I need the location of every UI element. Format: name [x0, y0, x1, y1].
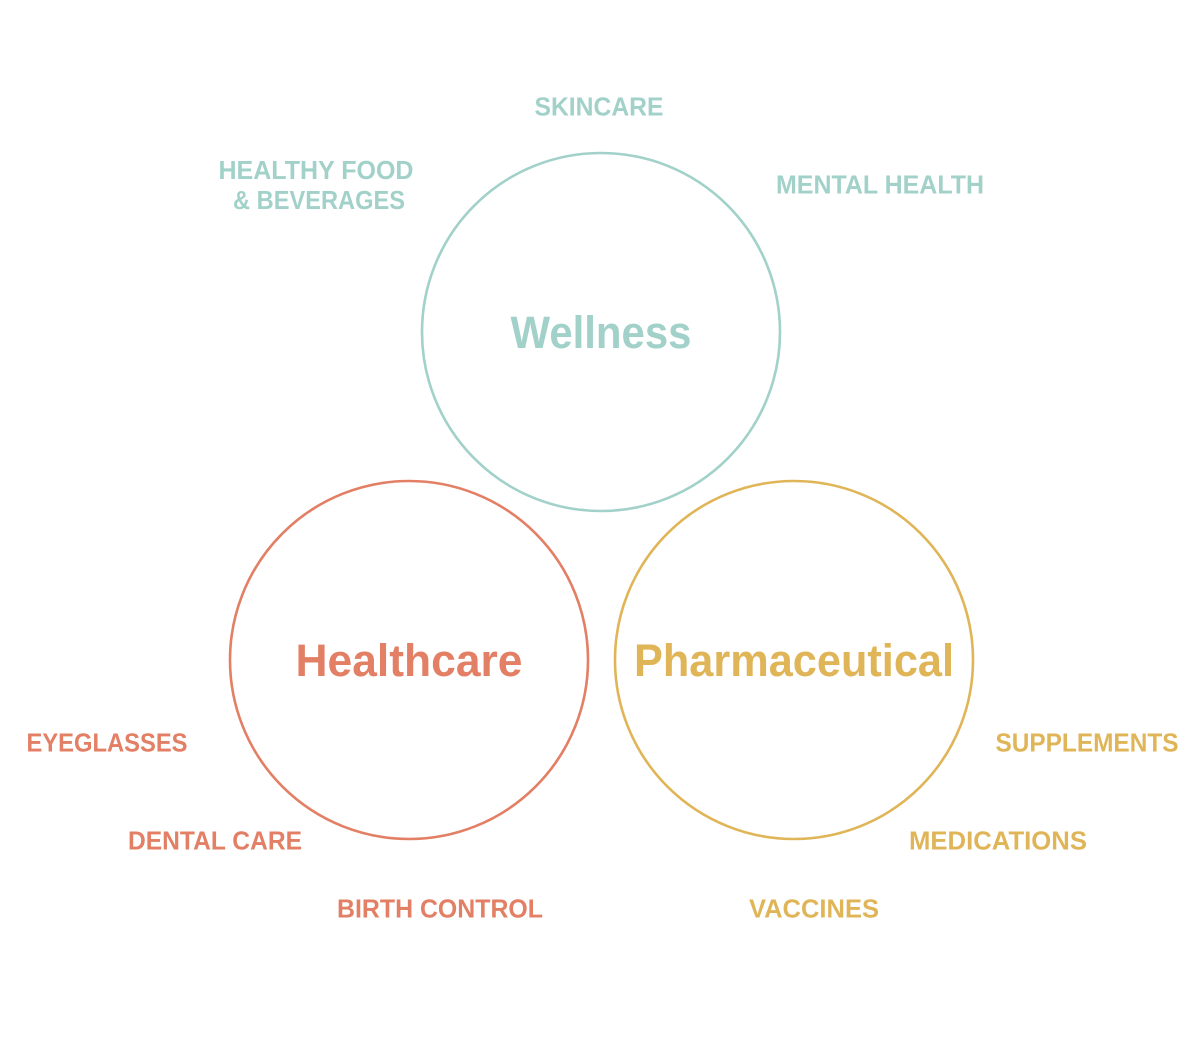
label: birth control: BIRTH CONTROL — [337, 894, 543, 924]
label: healthy food and beverages — [218, 155, 414, 215]
heading: pharmaceutical: Pharmaceutical — [634, 635, 954, 686]
label: healthy food and beverages: HEALTHY FOOD — [218, 155, 414, 185]
heading: wellness: Wellness — [510, 307, 692, 358]
heading: healthcare: Healthcare — [296, 635, 522, 686]
label: medications: MEDICATIONS — [909, 826, 1087, 856]
circle: healthcare — [230, 481, 588, 839]
label: dental care: DENTAL CARE — [128, 826, 302, 856]
label: healthy food and beverages: & BEVERAGES — [233, 185, 405, 215]
circle: wellness — [422, 153, 780, 511]
label: mental health: MENTAL HEALTH — [776, 170, 984, 200]
healthcare group — [26, 481, 588, 924]
label: skincare: SKINCARE — [534, 92, 664, 122]
label: eyeglasses: EYEGLASSES — [26, 728, 188, 758]
pharmaceutical group — [615, 481, 1178, 924]
circle: pharmaceutical — [615, 481, 973, 839]
wellness group — [218, 92, 984, 511]
label: supplements: SUPPLEMENTS — [996, 728, 1178, 758]
label: vaccines: VACCINES — [749, 894, 879, 924]
